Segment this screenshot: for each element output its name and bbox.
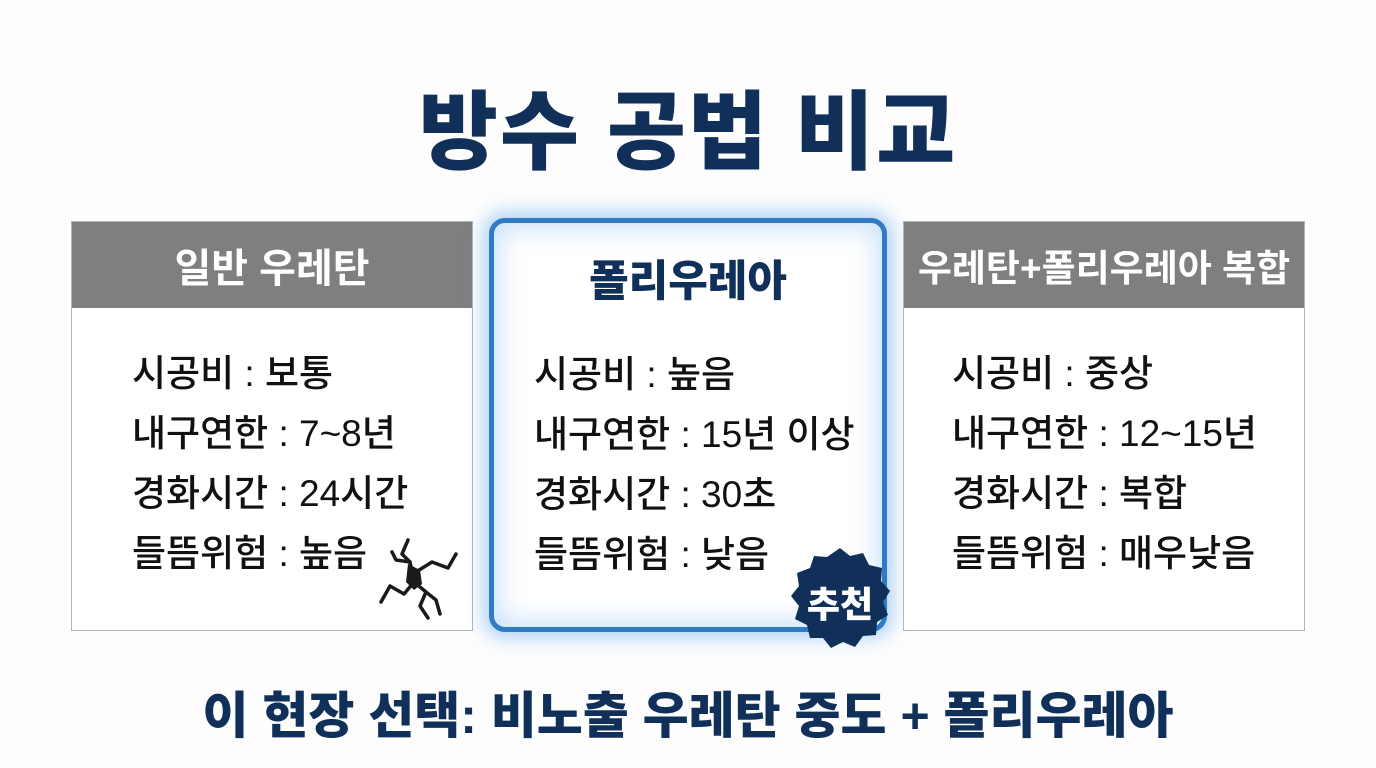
badge: recommended <box>791 548 890 648</box>
text block: general urethane specs: 경화시간 : 24시간 <box>132 473 408 514</box>
text block: polyurea specs: 경화시간 : 30초 <box>534 474 776 515</box>
text block: composite specs: 경화시간 : 복합 <box>952 473 1187 514</box>
panel: composite <box>903 221 1305 631</box>
text block: general urethane specs: 들뜸위험 : 높음 <box>132 533 367 574</box>
header: composite: 우레탄+폴리우레아 복합 <box>918 248 1290 289</box>
header: general urethane: 일반 우레탄 <box>174 247 370 291</box>
panel: polyurea (recommended) <box>489 218 887 632</box>
text block: polyurea specs: 들뜸위험 : 낮음 <box>534 534 769 575</box>
text block: general urethane specs: 내구연한 : 7~8년 <box>132 413 396 454</box>
text block: composite specs: 들뜸위험 : 매우낮음 <box>952 533 1255 574</box>
text block: polyurea specs <box>534 354 855 575</box>
header: composite <box>904 222 1304 308</box>
title: 방수 공법 비교 <box>419 85 957 181</box>
text block: composite specs <box>952 353 1257 574</box>
badge: recommended: 추천 <box>807 584 873 625</box>
text block: composite specs: 내구연한 : 12~15년 <box>952 413 1257 454</box>
text block: general urethane specs: 시공비 : 보통 <box>132 353 333 394</box>
text block: polyurea specs: 시공비 : 높음 <box>534 354 735 395</box>
bottom conclusion: 이 현장 선택: 비노출 우레탄 중도 + 폴리우레아 <box>202 688 1174 744</box>
header: general urethane <box>72 222 472 308</box>
text block: composite specs: 시공비 : 중상 <box>952 353 1153 394</box>
text block: polyurea specs: 내구연한 : 15년 이상 <box>534 414 855 455</box>
panel: general urethane <box>71 221 473 631</box>
header: polyurea: 폴리우레아 <box>589 258 787 306</box>
text block: general urethane specs <box>132 353 408 574</box>
icon: crack <box>379 538 458 620</box>
